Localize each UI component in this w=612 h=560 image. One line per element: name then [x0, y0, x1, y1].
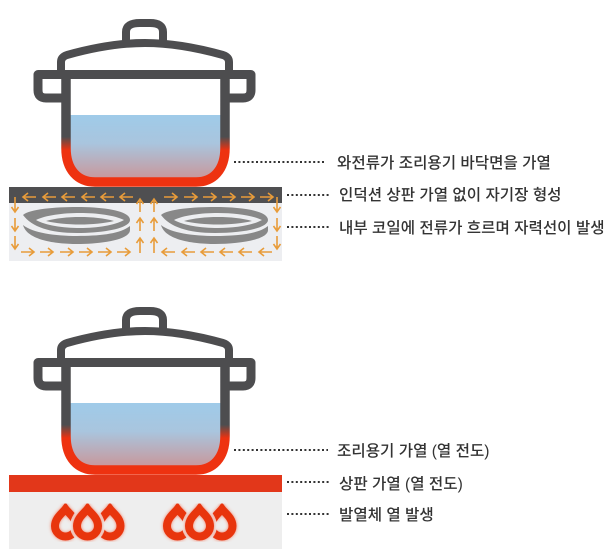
callout: coil current: 내부 코일에 전류가 흐르며 자력선이 발생 — [339, 219, 605, 237]
water — [70, 115, 221, 178]
arrows: magnetic field lines — [12, 193, 280, 256]
icon: left heat drops — [55, 509, 120, 536]
lid knob — [126, 311, 163, 332]
panel: induction cooktop diagram — [9, 187, 282, 261]
lid knob — [126, 23, 163, 44]
pot rim and handles — [38, 362, 251, 386]
cooktop inner body — [9, 492, 282, 549]
icon: right heat drops — [167, 509, 232, 536]
cooktop top plate — [9, 187, 282, 203]
callout: eddy current: 와전류가 조리용기 바닥면을 가열 — [337, 154, 551, 172]
callout: heating element: 발열체 열 발생 — [339, 506, 434, 524]
pot rim and handles — [38, 74, 251, 98]
cooktop inner body — [9, 203, 282, 261]
pot lid — [61, 43, 229, 72]
water — [70, 403, 221, 466]
icon: induction pot — [38, 23, 251, 182]
pot body — [66, 75, 225, 182]
callout: magnetic field: 인덕션 상판 가열 없이 자기장 형성 — [339, 186, 562, 204]
icon: right induction coil — [161, 207, 268, 244]
callout: top plate heating: 상판 가열 (열 전도) — [339, 475, 463, 493]
pot body — [66, 363, 225, 470]
callout: vessel heating: 조리용기 가열 (열 전도) — [337, 442, 490, 460]
cooktop heated top plate — [9, 475, 282, 492]
icon: left induction coil — [23, 207, 130, 244]
pot lid — [61, 331, 229, 360]
panel: radiant cooktop diagram — [9, 475, 282, 549]
icon: radiant pot — [38, 311, 251, 470]
